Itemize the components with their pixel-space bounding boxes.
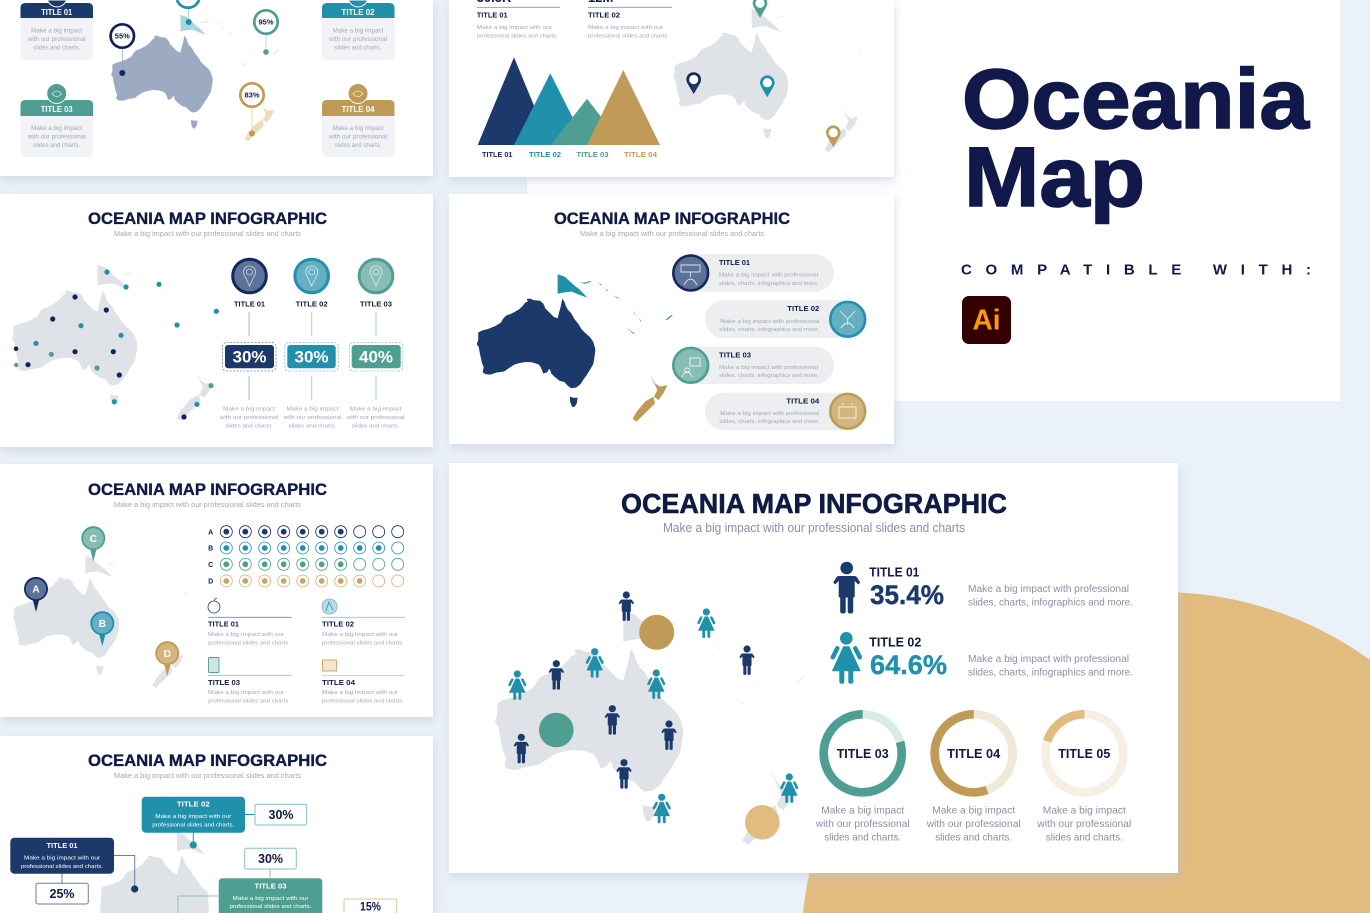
pin: D: D [164, 649, 171, 660]
pill: title 04: TITLE 04 [786, 396, 820, 405]
card: title 02: Make a big impact [332, 28, 384, 34]
card: title 01 [20, 0, 93, 60]
pin: teal [760, 75, 775, 97]
card: title 03: with our professional [27, 134, 86, 140]
panel: percent columns slide [0, 194, 433, 447]
card: title 04: slides and charts. [334, 143, 382, 149]
pill: title 03 [672, 347, 834, 384]
chart: dot grid [208, 526, 404, 587]
stat: title 02 64.6%: 64.6% [870, 650, 947, 680]
pin: 55%: 55% [115, 32, 130, 41]
pill: title 02 [705, 300, 867, 338]
column: title 01 30%: slides and charts. [225, 423, 273, 429]
callout: title 03: 30% [258, 851, 283, 866]
column: title 03 40% [346, 259, 405, 429]
callout: title 02: 30% [268, 807, 294, 822]
panel: callout boxes slide [0, 736, 433, 913]
column: title 03 40%: Make a big impact [350, 406, 402, 412]
column: title 02 30%: Make a big impact [286, 406, 339, 412]
card: title 01: slides and charts. [33, 46, 81, 52]
pin: navy [686, 72, 701, 94]
pill: title 01 [672, 254, 834, 292]
donut: title 05 [1035, 704, 1133, 844]
pin: 83%: 83% [244, 91, 260, 100]
callout: 15% box [344, 899, 397, 913]
column: title 02 30%: slides and charts. [288, 423, 337, 429]
chart labels: TITLE 02 [529, 150, 561, 159]
pin: B [90, 611, 114, 646]
subtitle: Make a big impact with our professional slides and charts [663, 521, 965, 535]
map: people map [495, 611, 806, 845]
stat: title 02 64.6%: Make a big impact with professional [968, 653, 1129, 665]
card: title 01: Make a big impact [31, 28, 83, 34]
stat: title 02 [588, 0, 672, 39]
icons: male people on map [514, 591, 755, 789]
panel: top middle slide [449, 0, 894, 177]
stat: title 01 [477, 0, 560, 39]
pin: A [24, 577, 48, 612]
subtitle: Make a big impact with our professional slides and charts [580, 229, 764, 238]
pill: title 04: slides, charts, infographics and more. [719, 419, 820, 425]
map: dotted map [12, 265, 219, 421]
item: title 01: professional slides and charts. [208, 640, 290, 646]
subtitle: Make a big impact with our professional slides and charts [114, 229, 301, 238]
icon: Ai badge: Ai [972, 304, 1000, 336]
heading: OCEANIA MAP INFOGRAPHIC [88, 209, 327, 228]
map: percent pins map [111, 15, 279, 141]
item: title 04: professional slides and charts. [322, 698, 404, 704]
item: title 04 [322, 660, 405, 704]
chart labels: TITLE 03 [576, 150, 608, 159]
map: lettered pins map [13, 556, 188, 688]
callout: title 01: TITLE 01 [46, 841, 78, 850]
callout: title 01: professional slides and charts. [21, 864, 103, 870]
panel: main slide [449, 463, 1178, 873]
donut: title 05: with our professional [1036, 818, 1131, 830]
callout: title 03: professional slides and charts. [230, 904, 312, 910]
heading: Oceania Map [962, 52, 1310, 224]
icons: female people on map [509, 608, 798, 823]
chart: dot grid: B [208, 546, 213, 553]
card: title 03 [20, 84, 93, 157]
stat: title 02 64.6%: TITLE 02 [869, 636, 921, 650]
pin: 55% [111, 24, 134, 76]
item: title 03: TITLE 03 [208, 678, 240, 687]
stat: title 01: TITLE 01 [477, 11, 508, 20]
chart: dot grid: C [208, 562, 213, 569]
column: title 01 30%: Make a big impact [223, 406, 275, 412]
heading: Oceania Map: Oceania [962, 52, 1310, 146]
pill: title 02: slides, charts, infographics and more. [719, 327, 820, 333]
donut: title 04: TITLE 04 [947, 747, 1000, 761]
stat: title 01 35.4%: Make a big impact with professional [968, 583, 1129, 595]
donut: title 05: Make a big impact [1043, 804, 1126, 816]
pin: 95% [254, 10, 278, 55]
column: title 03 40%: TITLE 03 [360, 300, 392, 308]
column: title 02 30%: 30% [294, 348, 328, 366]
card: title 01: TITLE 01 [41, 8, 73, 17]
subtitle: Make a big impact with our professional slides and charts [114, 771, 301, 780]
donut: title 03 [814, 705, 911, 844]
pill: title 02: Make a big impact with professional [720, 319, 819, 325]
card: title 02: with our professional [328, 37, 387, 43]
stat: title 01 35.4%: slides, charts, infographics and more. [968, 596, 1133, 608]
callout: title 01 [10, 838, 138, 904]
stat: title 02 64.6%: slides, charts, infographics and more. [968, 666, 1133, 678]
item: title 01: TITLE 01 [208, 620, 239, 629]
column: title 01 30% [219, 259, 278, 429]
callout: title 03 [178, 848, 322, 913]
donut: title 05: slides and charts. [1046, 832, 1123, 844]
column: title 01 30%: with our professional [219, 415, 278, 421]
donut: title 04 [924, 703, 1024, 844]
chart labels [482, 150, 658, 159]
card: title 04 [322, 84, 394, 157]
stat: title 02: TITLE 02 [588, 11, 620, 20]
stat: title 01: Make a big impact with our [477, 25, 552, 31]
callout: title 01: 25% [50, 886, 75, 901]
callout: title 02: professional slides and charts. [152, 822, 235, 828]
pin: green [753, 0, 767, 18]
callout: title 02: TITLE 02 [177, 800, 210, 809]
item: title 04: Make a big impact with our [322, 690, 398, 696]
card: title 04: with our professional [328, 134, 387, 140]
column: title 02 30%: TITLE 02 [296, 300, 328, 308]
stat: title 01 35.4% [833, 562, 1133, 614]
panel: pills slide [449, 194, 894, 444]
card: title 02 [322, 0, 394, 60]
donut: title 03: slides and charts. [824, 832, 901, 844]
pin: gold [826, 125, 841, 147]
panel: dot grid slide [0, 464, 433, 717]
heading: Oceania Map: Map [964, 130, 1145, 224]
subtitle: Make a big impact with our professional slides and charts [114, 500, 301, 509]
donut: title 05: TITLE 05 [1058, 747, 1110, 761]
pin: A: A [32, 585, 40, 596]
pin: 95%: 95% [258, 18, 274, 27]
card: title 03: TITLE 03 [41, 105, 73, 114]
heading: OCEANIA MAP INFOGRAPHIC [88, 480, 327, 499]
pin: C [81, 526, 105, 561]
callout: title 02: Make a big impact with our [155, 814, 231, 820]
chart: dot grid: D [208, 579, 213, 586]
panel: cover title [527, 0, 1340, 401]
callout: title 03: Make a big impact with our [232, 896, 309, 902]
chart: mountain triangles [478, 57, 660, 145]
item: title 02 [322, 599, 405, 646]
pin: 83% [240, 83, 264, 136]
stat: title 01 35.4%: TITLE 01 [869, 566, 919, 580]
card: title 01: with our professional [27, 37, 86, 43]
stat: title 02: Make a big impact with our [588, 25, 663, 31]
item: title 02: Make a big impact with our [322, 632, 398, 638]
map bubbles [539, 615, 780, 840]
icon: Ai badge [962, 296, 1011, 344]
pill: title 03: slides, charts, infographics and more. [719, 373, 819, 379]
stat: title 02 64.6% [832, 632, 1133, 684]
item: title 03 [208, 658, 292, 704]
item: title 02: TITLE 02 [322, 620, 354, 629]
donut: title 04: with our professional [926, 818, 1021, 830]
callout: title 02 [142, 797, 307, 849]
card: title 04: Make a big impact [332, 126, 384, 132]
heading: OCEANIA MAP INFOGRAPHIC [621, 488, 1007, 519]
column: title 02 30%: with our professional [282, 415, 342, 421]
card: title 02: slides and charts. [334, 46, 382, 52]
decorative tan circle [803, 592, 1370, 913]
map: location pins map [673, 9, 864, 152]
map: callout map (cropped at the page edge) [100, 832, 209, 913]
column: title 03 40%: slides and charts. [352, 423, 400, 429]
heading: OCEANIA MAP INFOGRAPHIC [554, 209, 790, 228]
column: title 01 30%: 30% [232, 348, 266, 366]
card: title 03: slides and charts. [33, 143, 81, 149]
donut: title 03: TITLE 03 [837, 747, 889, 761]
heading: OCEANIA MAP INFOGRAPHIC [88, 751, 327, 770]
item: title 01: Make a big impact with our [208, 632, 284, 638]
card: title 03: Make a big impact [31, 126, 83, 132]
stat: title 01: professional slides and charts. [477, 33, 558, 39]
column: title 01 30%: TITLE 01 [234, 300, 265, 308]
pin: D [155, 641, 179, 676]
column: title 03 40%: 40% [359, 348, 393, 366]
item: title 02: professional slides and charts. [322, 640, 404, 646]
donut: title 03: Make a big impact [821, 804, 904, 816]
card: title 02: TITLE 02 [342, 8, 375, 17]
item: title 04: TITLE 04 [322, 678, 356, 687]
pill: title 01: TITLE 01 [719, 258, 750, 267]
pin: C: C [90, 534, 97, 545]
stat: title 01 35.4%: 35.4% [870, 580, 944, 610]
card: title 04: TITLE 04 [342, 105, 375, 114]
pill: title 04: Make a big impact with professional [720, 411, 819, 417]
panel: top left slide [0, 0, 433, 176]
callout: title 03: TITLE 03 [254, 882, 286, 890]
pill: title 01: Make a big impact with professional [719, 272, 818, 278]
pill: title 01: slides, charts, infographics and more. [719, 281, 819, 287]
pill: title 03: TITLE 03 [719, 350, 751, 359]
map: coloured regions [477, 274, 673, 422]
item: title 01 [208, 598, 292, 646]
donut: title 03: with our professional [815, 818, 910, 830]
pill: title 03: Make a big impact with professional [719, 365, 818, 371]
item: title 03: professional slides and charts. [208, 698, 290, 704]
donut: title 04: slides and charts. [935, 832, 1012, 844]
item: title 03: Make a big impact with our [208, 690, 284, 696]
chart labels: TITLE 01 [482, 150, 512, 159]
stat: title 02: professional slides and charts. [588, 33, 669, 39]
compatible with label: COMPATIBLE WITH: [961, 262, 1311, 278]
donut: title 04: Make a big impact [932, 804, 1015, 816]
pin: top teal [177, 0, 199, 25]
pill: title 04 [705, 393, 867, 430]
pill: title 02: TITLE 02 [787, 304, 819, 313]
pin: B: B [99, 619, 106, 630]
callout: title 01: Make a big impact with our [24, 855, 100, 861]
column: title 03 40%: with our professional [346, 415, 405, 421]
chart labels: TITLE 04 [624, 150, 658, 159]
column: title 02 30% [282, 259, 342, 429]
chart: dot grid: A [208, 529, 213, 536]
